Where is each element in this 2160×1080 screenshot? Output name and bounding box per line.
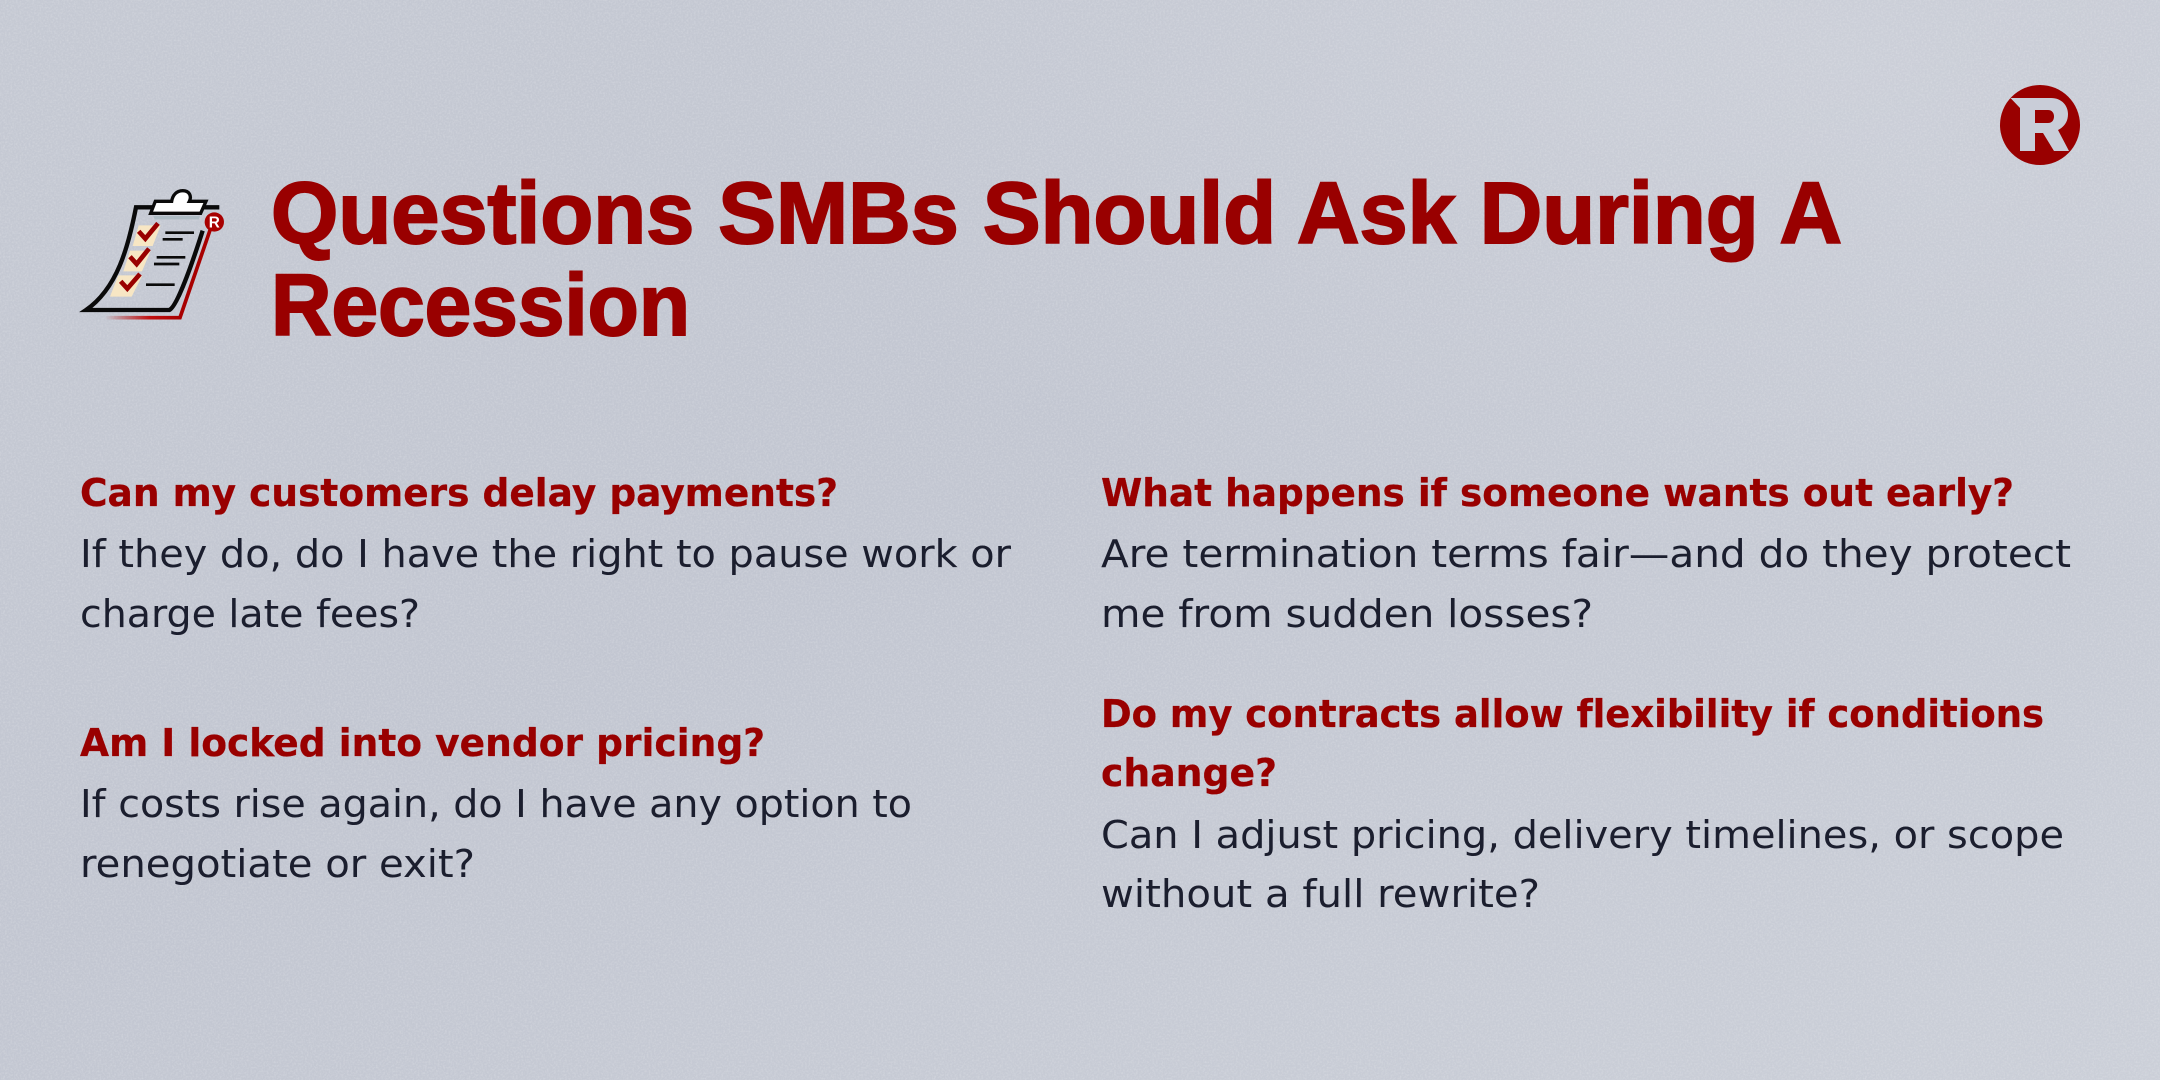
- question: contract flexibility: [1101, 692, 2064, 916]
- icon: checkbox one: [133, 223, 161, 246]
- question: vendor pricing: [80, 721, 912, 886]
- question: early exit: What happens if someone wants out early?: [1101, 471, 2014, 515]
- icon: checklist clipboard: [86, 191, 224, 318]
- question: customers delaying payments: [80, 471, 1011, 636]
- title: [271, 165, 1842, 354]
- question: contract flexibility: Do my contracts allow flexibility if conditions: [1101, 692, 2044, 736]
- icon: small R badge: R: [209, 214, 220, 231]
- question: contract flexibility: Can I adjust pricing, delivery timelines, or scope: [1101, 813, 2064, 857]
- question: vendor pricing: renegotiate or exit?: [80, 842, 475, 886]
- question: customers delaying payments: charge late fees?: [80, 592, 420, 636]
- logo: R roundel: [2000, 85, 2080, 165]
- icon: clipboard sheet outline: [86, 207, 219, 310]
- question: contract flexibility: change?: [1101, 751, 1277, 795]
- question: customers delaying payments: Can my customers delay payments?: [80, 471, 838, 515]
- question: vendor pricing: Am I locked into vendor pricing?: [80, 721, 765, 765]
- icon: clip shadow: [153, 216, 200, 219]
- icon: list lines: [146, 231, 202, 297]
- icon: checkbox three: [110, 274, 142, 297]
- question: early exit: [1101, 471, 2071, 636]
- question: contract flexibility: without a full rewrite?: [1101, 872, 1540, 916]
- question: vendor pricing: If costs rise again, do I have any option to: [80, 782, 912, 826]
- icon: checkbox two: [123, 249, 151, 271]
- question: early exit: me from sudden losses?: [1101, 592, 1593, 636]
- question: customers delaying payments: If they do, do I have the right to pause work or: [80, 532, 1011, 576]
- icon: red back sheet edge: [105, 228, 211, 318]
- title: Questions SMBs Should Ask During A: [271, 165, 1842, 262]
- title: Recession: [271, 257, 690, 354]
- question: early exit: Are termination terms fair—and do they protect: [1101, 532, 2071, 576]
- icon: clip: [151, 191, 206, 213]
